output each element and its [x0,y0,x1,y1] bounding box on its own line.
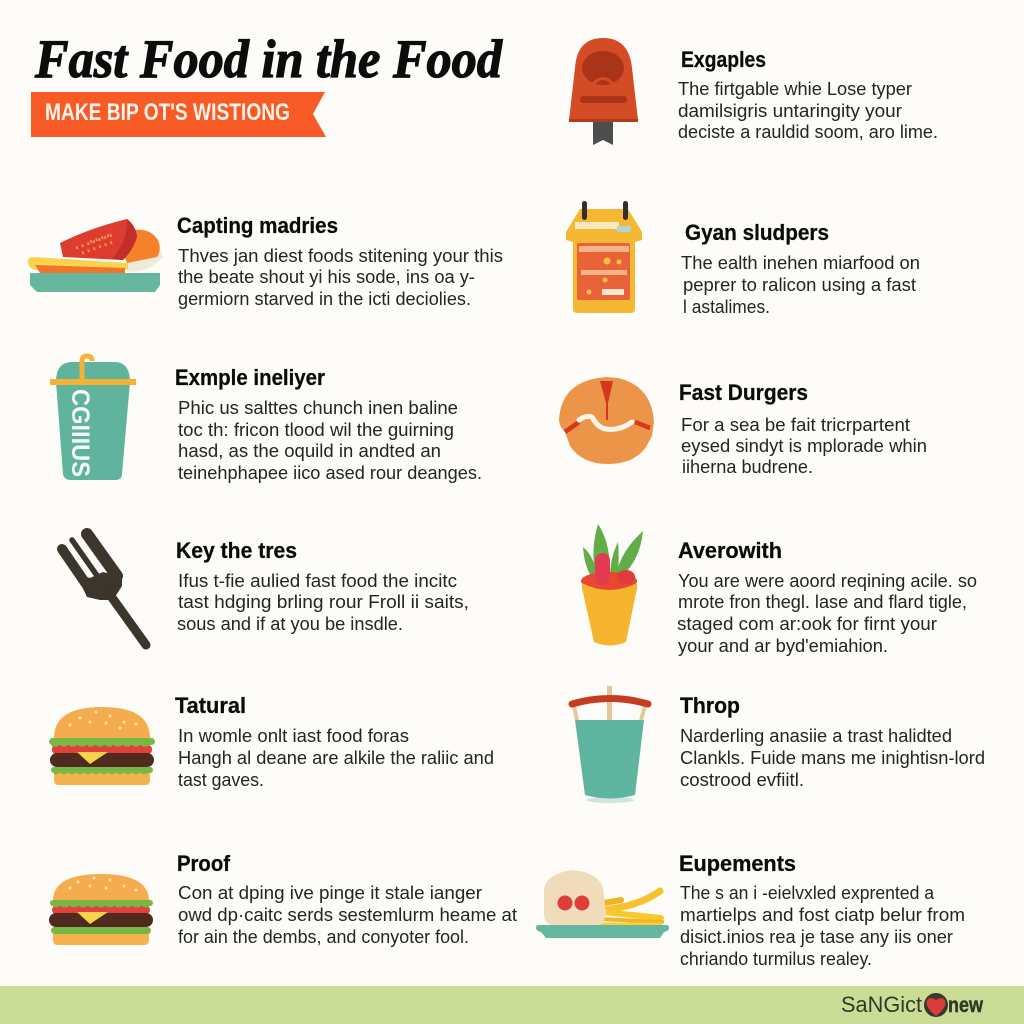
icon: teal drink cup [572,686,648,803]
section: Key the tres [176,538,469,634]
section: Eupements: chriando turmilus realey. [680,948,872,969]
section: Tatural: In womle onlt iast food foras [178,725,409,746]
section: Throp [680,693,985,790]
section: Throp: costrood evfiitl. [680,769,804,790]
section: Gyan sludpers: Gyan sludpers [685,220,829,245]
footer band [0,986,1024,1024]
section: Capting madries: Thves jan diest foods stitening your this [178,245,503,266]
section: Key the tres: Ifus t-fie aulied fast food the incitc [178,570,457,591]
section: Exmple ineliyer: Phic us salttes chunch inen baline [178,397,458,418]
section: Gyan sludpers: The ealth inehen miarfood on [681,252,920,273]
icon: yellow bucket [566,201,642,313]
section: Eupements [679,851,965,969]
section: Proof: for ain the dembs, and conyoter fool. [178,926,469,947]
section: Fast Durgers: iiherna budrene. [682,456,813,477]
section: Capting madries: the beate shout yi his sode, ins oa y- [178,266,475,287]
section: Gyan sludpers: l astalimes. [683,296,770,317]
section: Exmple ineliyer: toc th: fricon tlood wil the guirning [178,419,454,440]
section: Eupements: disict.inios rea je tase any iis oner [680,926,953,947]
icon: plant in yellow cup [581,524,643,646]
section: Fast Durgers: Fast Durgers [679,380,808,405]
section: Throp: Clankls. Fuide mans me inightisn-lord [680,747,985,768]
section: Key the tres: tast hdging brling rour Froll ii saits, [178,591,469,612]
section: Eupements: martielps and fost ciatp belur from [680,904,965,925]
section: Eupements: Eupements [679,851,796,876]
section: Exgaples: deciste a rauldid soom, aro lime. [678,121,938,142]
banner [31,92,326,137]
banner: MAKE BIP OT'S WISTIONG [45,99,290,126]
icon: red mailbox [569,38,638,145]
section: Capting madries [177,213,503,309]
section: Proof: owd dp·caitc serds sestemlurm heame at [178,904,517,925]
section: Capting madries: Capting madries [177,213,338,238]
section: Proof: Con at dping ive pinge it stale ianger [178,882,482,903]
icon: fork [62,534,146,645]
icon: burger 2 [49,874,153,945]
section: Averowith: You are were aoord reqining acile. so [678,570,977,591]
title: Fast Food in the Food [34,29,503,89]
section: Averowith: staged com ar:ook for firnt your [677,613,937,634]
section: Exmple ineliyer: hasd, as the oquild in andted an [178,440,441,461]
section: Exmple ineliyer: Exmple ineliyer [175,365,325,390]
section: Exgaples [678,47,938,142]
section: Key the tres: Key the tres [176,538,297,563]
icon: burger [49,707,155,785]
section: Throp: Throp [680,693,740,718]
section: Capting madries: germiorn starved in the icti deciolies. [178,288,471,309]
section: Exmple ineliyer [175,365,482,483]
section: Proof: Proof [177,851,231,876]
section: Fast Durgers: For a sea be fait tricrpartent [681,414,910,435]
footer logo: new [948,994,984,1017]
icon: round bun [559,377,654,464]
section: Fast Durgers [679,380,927,477]
section: Exgaples: Exgaples [681,47,766,72]
footer logo: SaNGict [841,992,922,1017]
footer logo [841,992,984,1017]
section: Gyan sludpers [681,220,920,317]
section: Exgaples: damilsigris untaringity your [678,100,902,121]
section: Tatural [175,693,494,790]
icon: bun and fries on tray [536,870,669,938]
icon: teal cup [50,356,136,480]
section: Proof [177,851,517,947]
section: Averowith: Averowith [678,538,782,563]
section: Gyan sludpers: peprer to ralicon using a fast [683,274,916,295]
section: Throp: Narderling anasiie a trast halidted [680,725,952,746]
section: Tatural: tast gaves. [178,769,264,790]
section: Tatural: Hangh al deane are alkile the raliic and [178,747,494,768]
section: Averowith: your and ar byd'emiahion. [678,635,888,656]
section: Exgaples: The firtgable whie Lose typer [678,78,912,99]
icon: teal cup: CGIIIUS [66,389,94,477]
section: Tatural: Tatural [175,693,246,718]
section: Exmple ineliyer: teinehphapee iico ased rour deanges. [178,462,482,483]
section: Eupements: The s an i -eielvxled exprented a [680,882,935,903]
section: Averowith: mrote fron thegl. lase and flard tigle, [678,591,967,612]
section: Fast Durgers: eysed sindyt is mplorade whin [681,435,927,456]
section: Averowith [677,538,977,656]
section: Key the tres: sous and if at you be insdle. [177,613,403,634]
icon: plate of food [28,219,163,292]
